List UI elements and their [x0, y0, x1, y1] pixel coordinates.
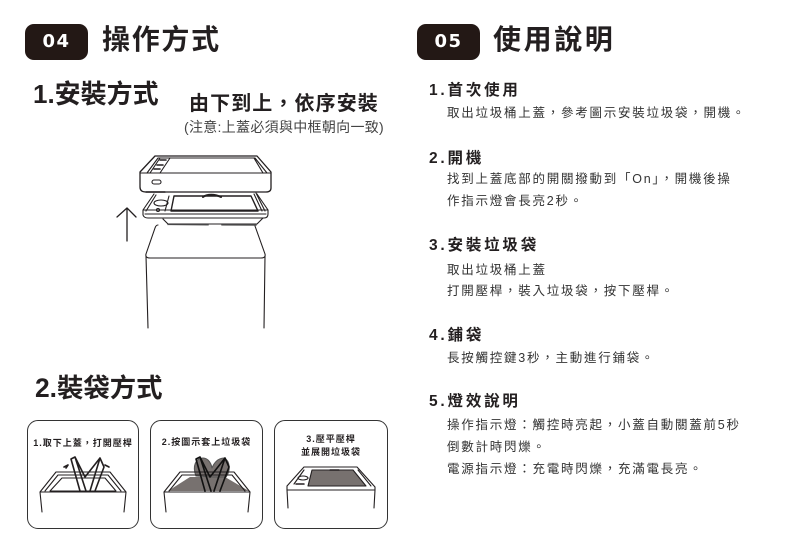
body: 找到上蓋底部的開關撥動到「On」，開機後操 — [447, 172, 732, 186]
badge: section 05: 05 — [434, 31, 463, 52]
heading: 3.安裝垃圾袋 — [429, 237, 539, 254]
step 1 bin with open press bars — [40, 457, 126, 512]
caption: step 3: 3.壓平壓桿 — [306, 434, 356, 444]
step 1: first use — [429, 82, 746, 120]
install instruction: bottom to top: 由下到上，依序安裝 — [189, 93, 379, 115]
step 3: install bag — [429, 236, 675, 298]
subheading: bag fitting method: 2.裝袋方式 — [35, 373, 163, 403]
heading: operation method: 操作方式 — [102, 24, 221, 55]
body: 長按觸控鍵3秒，主動進行鋪袋。 — [447, 351, 655, 365]
body line 3: 電源指示燈：充電時閃爍，充滿電長亮。 — [447, 462, 704, 476]
body line 2: 作指示燈會長亮2秒。 — [447, 194, 584, 208]
body: 取出垃圾桶上蓋 — [447, 263, 547, 277]
lid — [140, 156, 271, 192]
arrow: upward — [117, 208, 136, 241]
heading: 1.首次使用 — [429, 82, 521, 99]
caption: step 1: 1.取下上蓋，打開壓桿 — [33, 438, 133, 448]
step 2: power on — [429, 150, 732, 208]
body: 取出垃圾桶上蓋，參考圖示安裝垃圾袋，開機。 — [447, 106, 746, 120]
card: step 3 — [274, 420, 388, 529]
caption: step 2: 2.按圖示套上垃圾袋 — [162, 437, 251, 447]
heading: usage instructions: 使用說明 — [493, 24, 615, 55]
body line 2: 打開壓桿，裝入垃圾袋，按下壓桿。 — [447, 284, 675, 298]
middle frame — [143, 193, 268, 218]
badge: section 04: 04 — [42, 31, 71, 52]
heading: 4.鋪袋 — [429, 327, 484, 344]
badge: section 04 — [25, 24, 88, 60]
caption: step 3: 並展開垃圾袋 — [301, 447, 361, 457]
caption: step 3 — [301, 434, 361, 457]
heading: 5.燈效說明 — [429, 393, 521, 410]
step 5: lights — [429, 392, 741, 476]
card: step 2 — [150, 420, 263, 529]
step 3 bin with flattened bag — [287, 467, 375, 508]
lower plate — [163, 218, 263, 225]
body line 2: 倒數計時閃爍。 — [447, 440, 547, 454]
heading: 2.開機 — [429, 150, 484, 167]
body: 操作指示燈：觸控時亮起，小蓋自動關蓋前5秒 — [447, 418, 741, 432]
install note: (注意:上蓋必須與中框朝向一致) — [184, 119, 384, 135]
badge: section 05 — [417, 24, 480, 60]
bin body — [146, 225, 265, 328]
subheading: installation method: 1.安裝方式 — [33, 79, 159, 109]
step 2 bin with bag — [164, 457, 250, 512]
step 4: bagging — [429, 326, 655, 365]
card: step 1 — [27, 420, 139, 529]
